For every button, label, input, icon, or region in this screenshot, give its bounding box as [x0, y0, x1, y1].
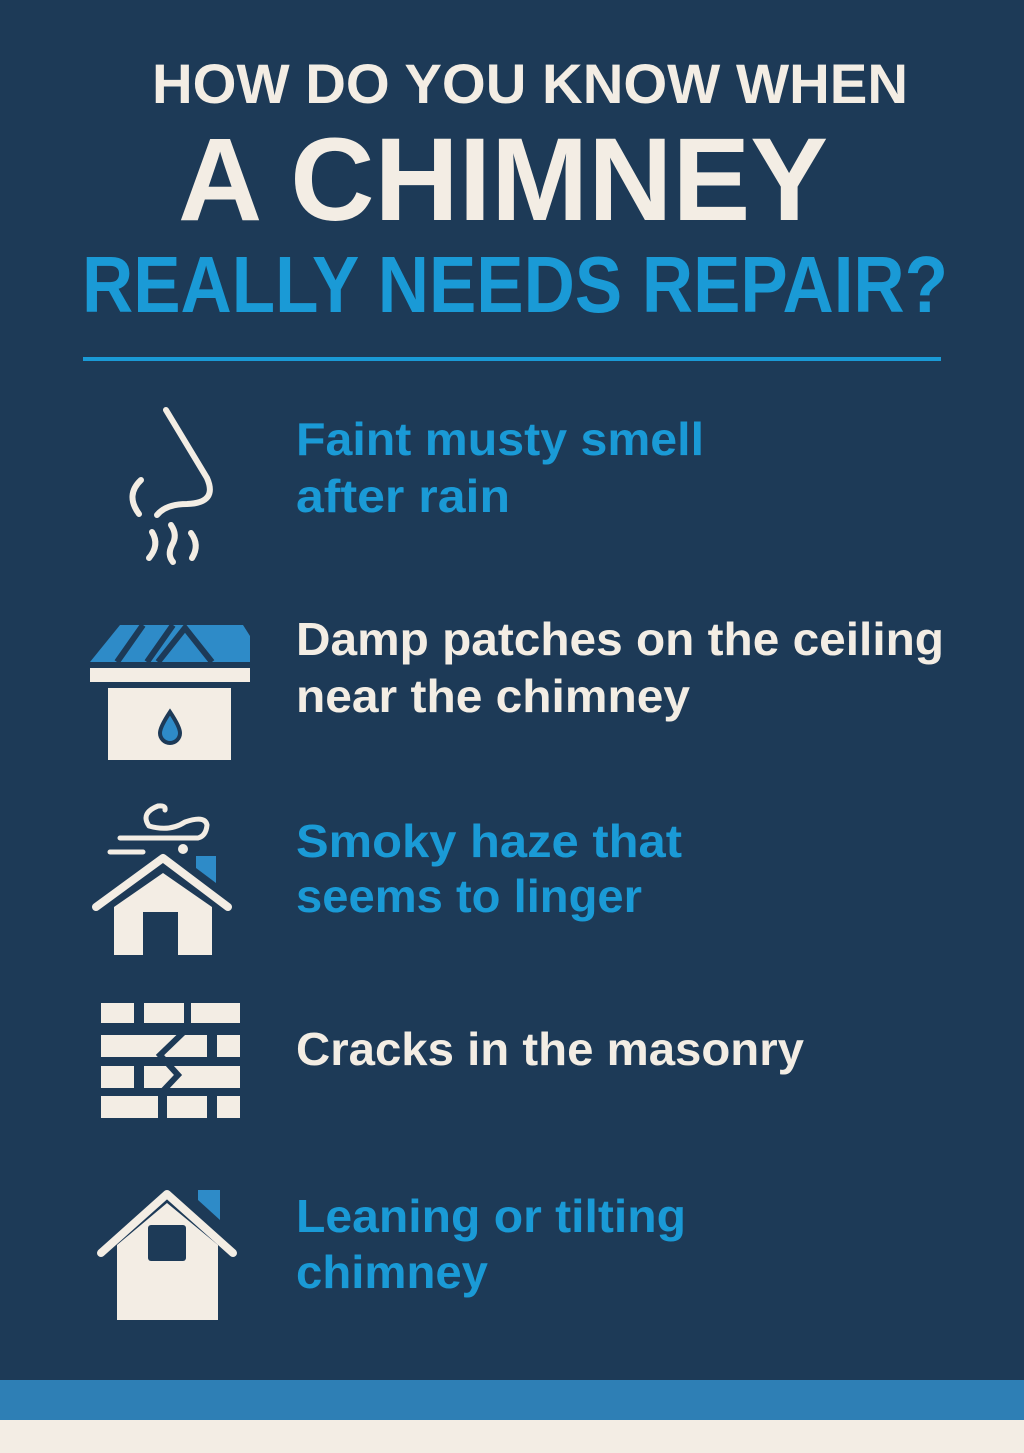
title: HOW DO YOU KNOW WHEN: [152, 52, 908, 115]
text: musty smell: Faint musty smell: [296, 413, 704, 465]
text: damp patches: Damp patches on the ceiling: [296, 613, 944, 665]
text: seems to linger: [296, 870, 642, 922]
text: cracks: Cracks in the masonry: [296, 1023, 804, 1075]
title: [82, 52, 948, 329]
icon: ceiling damp: [90, 625, 250, 760]
icon: smoky house: [96, 806, 228, 955]
text: leaning: Leaning or tilting: [296, 1190, 686, 1242]
icon: cracked bricks: [101, 1003, 240, 1118]
icon: nose: [132, 410, 210, 562]
title: A CHIMNEY: [178, 114, 828, 246]
text: near the chimney: [296, 670, 690, 722]
text: smoky haze: Smoky haze that: [296, 815, 682, 867]
text: chimney: [296, 1246, 488, 1298]
icon: leaning house: [101, 1190, 233, 1320]
footer stripes: [0, 1380, 1024, 1453]
text: after rain: [296, 470, 510, 522]
